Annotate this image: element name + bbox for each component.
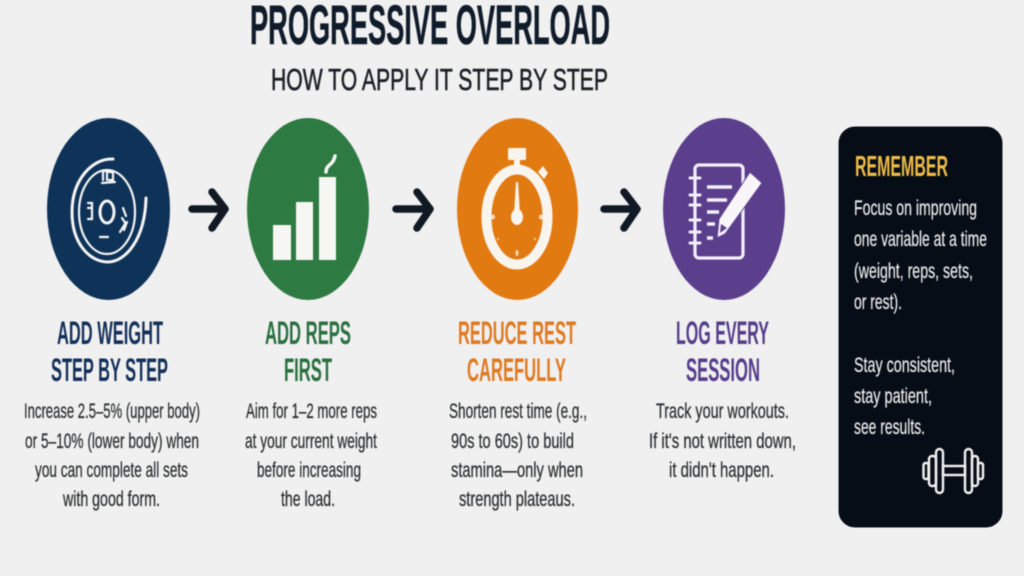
heading: log every: LOG EVERY: [676, 315, 769, 351]
column 1: add weight: [24, 315, 200, 511]
body text: with good form.: [62, 488, 160, 511]
body text: Track your workouts.: [656, 400, 789, 423]
body text: at your current weight: [245, 430, 377, 453]
icon: weight plate circle: [47, 118, 170, 300]
body text: strength plateaus.: [459, 488, 575, 511]
body text: [449, 400, 587, 511]
icon: notebook and pencil circle: [663, 118, 785, 300]
subtitle: HOW TO APPLY IT STEP BY STEP: [271, 62, 608, 97]
panel text: focus: [854, 197, 987, 314]
panel text: consistency: [854, 354, 955, 439]
panel text: consistency: Stay consistent,: [854, 354, 955, 377]
panel text: focus: or rest).: [854, 291, 902, 314]
column 2: add reps: [245, 315, 377, 511]
heading line 2: FIRST: [284, 352, 332, 388]
arrow 2: [396, 192, 430, 228]
panel heading: REMEMBER: [855, 151, 948, 183]
heading line 2: SESSION: [686, 352, 760, 388]
body text: Shorten rest time (e.g.,: [449, 400, 587, 423]
panel text: consistency: stay patient,: [854, 385, 932, 408]
icon: dumbbell: [924, 449, 983, 493]
column 3: reduce rest: [449, 315, 587, 511]
heading: add reps: ADD REPS: [265, 315, 351, 351]
body text: [24, 400, 200, 511]
panel text: consistency: see results.: [854, 416, 925, 439]
arrow 3: [604, 192, 637, 228]
body text: before increasing: [257, 459, 361, 482]
body text: or 5–10% (lower body) when: [25, 430, 199, 453]
column 4: log every session: [649, 315, 796, 482]
body text: 90s to 60s) to build: [451, 430, 574, 453]
body text: it didn't happen.: [669, 459, 774, 482]
heading line 2: STEP BY STEP: [51, 352, 168, 388]
icon: rising bars circle: [247, 118, 369, 300]
body text: the load.: [281, 488, 335, 511]
body text: [245, 400, 377, 511]
body text: Aim for 1–2 more reps: [246, 400, 377, 423]
arrow 1: [192, 192, 225, 228]
body text: you can complete all sets: [35, 459, 188, 482]
heading line 2: CAREFULLY: [467, 352, 566, 388]
panel: remember: [838, 126, 1003, 528]
heading: add weight: ADD WEIGHT: [57, 315, 163, 351]
body text: If it's not written down,: [649, 430, 796, 453]
icon: stopwatch circle: [457, 118, 578, 300]
body text: stamina—only when: [451, 459, 583, 482]
body text: Increase 2.5–5% (upper body): [24, 400, 200, 423]
body text: [649, 400, 796, 482]
heading: reduce rest: REDUCE REST: [458, 315, 576, 351]
